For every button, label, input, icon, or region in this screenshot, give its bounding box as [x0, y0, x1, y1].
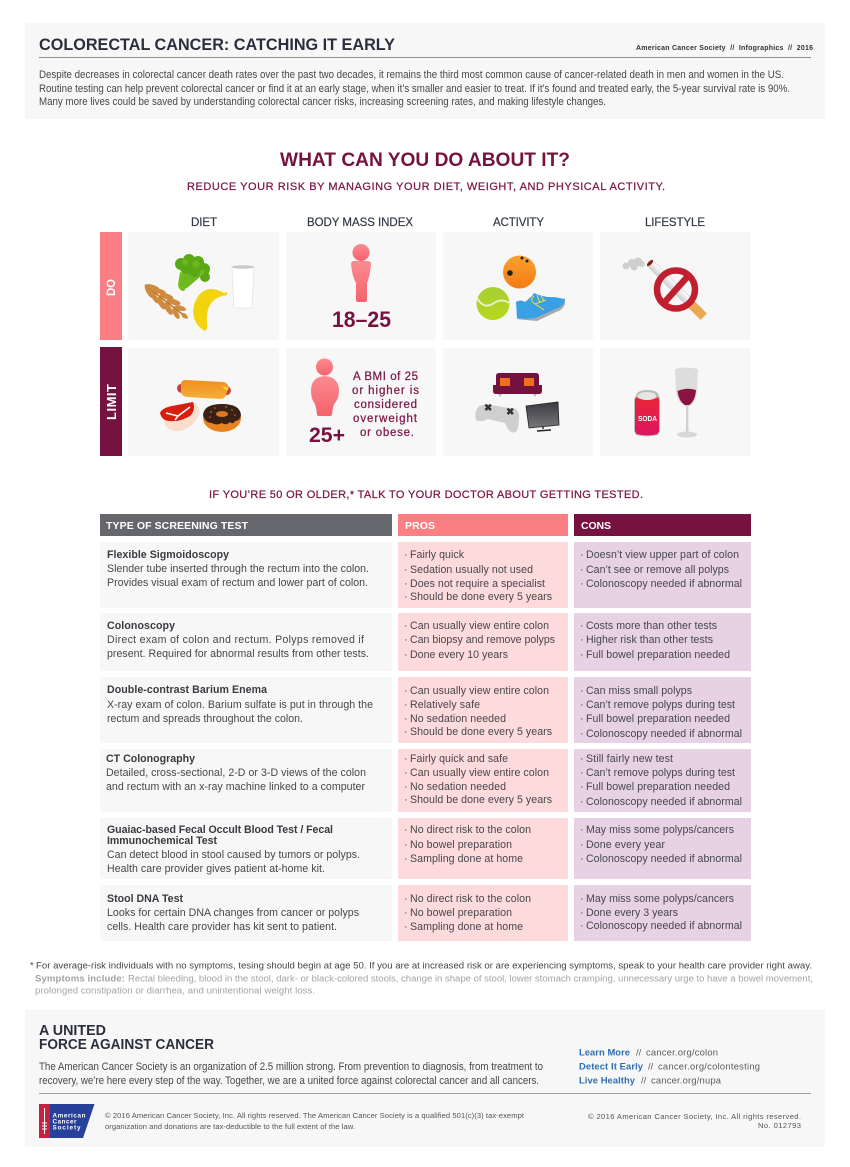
- footer links: //: [636, 1046, 642, 1058]
- row: ct colonography: Should be done every 5 years: [410, 794, 552, 806]
- row: double-contrast barium enema: Can’t remove polyps during test: [586, 699, 735, 711]
- row: ct colonography: CT Colonography: [106, 753, 195, 765]
- row: guaiac-based fecal occult blood test: ·: [580, 853, 584, 865]
- row: flexible sigmoidoscopy: ·: [580, 549, 584, 561]
- panel: bmi do: [286, 232, 436, 340]
- row: colonoscopy: present. Required for abnormal results from other tests.: [107, 648, 369, 660]
- row: guaiac-based fecal occult blood test: Health care provider gives patient at-home kit.: [107, 863, 325, 875]
- panel: diet do: [128, 232, 279, 340]
- bmi note: considered: [354, 399, 417, 411]
- row: ct colonography: Full bowel preparation needed: [586, 781, 730, 793]
- icon: donut: [203, 404, 241, 432]
- row: ct colonography: No sedation needed: [410, 781, 506, 793]
- row: flexible sigmoidoscopy: ·: [580, 578, 584, 590]
- row: guaiac-based fecal occult blood test: ·: [404, 853, 408, 865]
- row: colonoscopy: Can usually view entire colon: [410, 620, 549, 632]
- row: flexible sigmoidoscopy: ·: [404, 564, 408, 576]
- row: flexible sigmoidoscopy: ·: [404, 549, 408, 561]
- row: stool dna test: Looks for certain DNA changes from cancer or polyps: [107, 907, 359, 919]
- footer heading: FORCE AGAINST CANCER: [39, 1037, 214, 1053]
- row: guaiac-based fecal occult blood test: Guaiac-based Fecal Occult Blood Test / Fecal: [107, 824, 333, 836]
- footer links: Learn More: [579, 1046, 630, 1058]
- row: colonoscopy: ·: [404, 649, 408, 661]
- row: stool dna test: ·: [404, 921, 408, 933]
- row: colonoscopy: Full bowel preparation needed: [586, 649, 730, 661]
- row: guaiac-based fecal occult blood test: Can detect blood in stool caused by tumors or polyps.: [107, 849, 360, 861]
- row: stool dna test: cells. Health care provider has kit sent to patient.: [107, 921, 337, 933]
- row: guaiac-based fecal occult blood test: Immunochemical Test: [107, 835, 217, 847]
- row label: limit: [100, 347, 122, 456]
- column labels: LIFESTYLE: [645, 217, 705, 229]
- row: ct colonography: [100, 749, 751, 812]
- row: guaiac-based fecal occult blood test: ·: [404, 824, 408, 836]
- row: stool dna test: May miss some polyps/cancers: [586, 893, 734, 905]
- icon: soda can: SODA: [638, 416, 657, 423]
- row: flexible sigmoidoscopy: Sedation usually not used: [410, 564, 533, 576]
- row: flexible sigmoidoscopy: ·: [404, 578, 408, 590]
- bmi note: [352, 371, 419, 439]
- footer links: Detect It Early: [579, 1060, 644, 1072]
- bmi note: overweight: [353, 413, 418, 425]
- row: ct colonography: ·: [404, 794, 408, 806]
- row: colonoscopy: ·: [580, 634, 584, 646]
- legal text: [105, 1111, 525, 1131]
- icon: tennis ball: [476, 287, 510, 320]
- panel: activity do: [443, 232, 593, 340]
- row: double-contrast barium enema: ·: [404, 726, 408, 738]
- row: colonoscopy: Colonoscopy: [107, 620, 175, 632]
- footnote: prolonged constipation or diarrhea, and unintentional weight loss.: [35, 986, 315, 996]
- footer heading: A UNITED: [39, 1023, 106, 1039]
- row: double-contrast barium enema: Can miss small polyps: [586, 685, 692, 697]
- logo: american cancer society: [39, 1104, 94, 1138]
- icon: game controller: ✖: [484, 403, 492, 414]
- row: ct colonography: Colonoscopy needed if abnormal: [586, 796, 742, 808]
- icon: game controller: ✖: [506, 407, 514, 418]
- footer text: The American Cancer Society is an organization of 2.5 million strong. From prevention to diagnosis, from treatment to: [39, 1061, 543, 1073]
- icon: healthy figure: [351, 244, 371, 302]
- row: ct colonography: ·: [580, 767, 584, 779]
- footer text: [39, 1061, 543, 1087]
- row: stool dna test: No bowel preparation: [410, 907, 512, 919]
- row: ct colonography: ·: [404, 781, 408, 793]
- row: colonoscopy: ·: [404, 634, 408, 646]
- icon: sneaker: [516, 293, 565, 321]
- icon: broccoli: [175, 254, 210, 291]
- row: double-contrast barium enema: rectum and spreads throughout the colon.: [107, 713, 303, 725]
- row: guaiac-based fecal occult blood test: Sampling done at home: [410, 853, 523, 865]
- row: colonoscopy: Can biopsy and remove polyps: [410, 634, 555, 646]
- row: double-contrast barium enema: ·: [580, 713, 584, 725]
- icon: hot dog: [177, 380, 231, 399]
- table header: cons: CONS: [581, 520, 611, 532]
- row: flexible sigmoidoscopy: Should be done every 5 years: [410, 591, 552, 603]
- row: stool dna test: No direct risk to the colon: [410, 893, 531, 905]
- row: ct colonography: ·: [404, 767, 408, 779]
- table header: pros: [398, 514, 568, 536]
- table: screening tests: [100, 514, 751, 941]
- copyright and number: No. 012793: [758, 1121, 801, 1130]
- footer links: //: [641, 1074, 647, 1086]
- row: flexible sigmoidoscopy: Fairly quick: [410, 549, 465, 561]
- row: ct colonography: and rectum with an x-ray machine linked to a computer: [106, 781, 365, 793]
- row: colonoscopy: Direct exam of colon and rectum. Polyps removed if: [107, 634, 364, 646]
- icon: soda can: [634, 390, 660, 436]
- row: flexible sigmoidoscopy: Slender tube inserted through the rectum into the colon.: [107, 563, 369, 575]
- footnote: [30, 960, 813, 996]
- row: double-contrast barium enema: Can usually view entire colon: [410, 685, 549, 697]
- row: double-contrast barium enema: ·: [580, 728, 584, 740]
- row: double-contrast barium enema: [100, 677, 751, 743]
- bmi range: 18–25: [332, 307, 391, 332]
- row: colonoscopy: Higher risk than other tests: [586, 634, 713, 646]
- row: stool dna test: ·: [404, 893, 408, 905]
- row: ct colonography: Can usually view entire colon: [410, 767, 549, 779]
- icon: no smoking: [646, 259, 707, 320]
- icon: glass of milk: [232, 265, 254, 308]
- row: colonoscopy: ·: [580, 620, 584, 632]
- row: ct colonography: Fairly quick and safe: [410, 753, 508, 765]
- row: guaiac-based fecal occult blood test: ·: [580, 839, 584, 851]
- row: stool dna test: ·: [580, 920, 584, 932]
- row: double-contrast barium enema: ·: [404, 685, 408, 697]
- subheading: reduce your risk: REDUCE YOUR RISK BY MANAGING YOUR DIET, WEIGHT, AND PHYSICAL ACTIVITY.: [187, 181, 665, 193]
- row: ct colonography: Can’t remove polyps during test: [586, 767, 735, 779]
- table header: pros: PROS: [405, 520, 435, 532]
- row: guaiac-based fecal occult blood test: ·: [404, 839, 408, 851]
- row label: do: [100, 232, 122, 340]
- legal text: © 2016 American Cancer Society, Inc. All rights reserved. The American Cancer Society is a qualified 501(c)(3) tax-exempt: [105, 1111, 525, 1120]
- legal text: organization and donations are tax-deductible to the full extent of the law.: [105, 1122, 355, 1131]
- row: colonoscopy: [100, 613, 751, 671]
- row: flexible sigmoidoscopy: Colonoscopy needed if abnormal: [586, 578, 742, 590]
- row: ct colonography: ·: [580, 796, 584, 808]
- row: guaiac-based fecal occult blood test: [100, 818, 751, 879]
- panel: footer: [25, 1010, 825, 1147]
- row: double-contrast barium enema: ·: [404, 713, 408, 725]
- row: stool dna test: [100, 885, 751, 941]
- row: double-contrast barium enema: Relatively safe: [410, 699, 480, 711]
- intro text: Routine testing can help prevent colorectal cancer or find it at an early stage, when it’s smaller and easier to treat. If it’s found and treated early, the 5-year survival rate is 90%.: [39, 83, 790, 95]
- panel: bmi limit: [286, 348, 436, 456]
- icon: smoke: [622, 258, 645, 270]
- bmi 25 plus: 25+: [309, 424, 345, 447]
- row: flexible sigmoidoscopy: Can’t see or remove all polyps: [586, 564, 729, 576]
- footnote: For average-risk individuals with no symptoms, tesing should begin at age 50. If you are at increased risk or are experiencing symptoms, speak to your health care provider right away.: [36, 960, 812, 972]
- row: flexible sigmoidoscopy: Provides visual exam of rectum and lower part of colon.: [107, 577, 368, 589]
- row: colonoscopy: ·: [580, 649, 584, 661]
- icon: bowling ball: [503, 256, 536, 288]
- row: flexible sigmoidoscopy: Flexible Sigmoidoscopy: [107, 549, 229, 561]
- row: ct colonography: ·: [404, 753, 408, 765]
- row: guaiac-based fecal occult blood test: Colonoscopy needed if abnormal: [586, 853, 742, 865]
- row: stool dna test: Colonoscopy needed if abnormal: [586, 920, 742, 932]
- footer text: recovery, we’re here every step of the way. Together, we are a united force against colorectal cancer and all cancers.: [39, 1075, 539, 1087]
- bmi note: or obese.: [360, 427, 414, 439]
- row label: limit: LIMIT: [104, 384, 119, 420]
- row: double-contrast barium enema: ·: [580, 699, 584, 711]
- row: ct colonography: Detailed, cross-sectional, 2-D or 3-D views of the colon: [106, 767, 366, 779]
- row: guaiac-based fecal occult blood test: No direct risk to the colon: [410, 824, 531, 836]
- row: ct colonography: ·: [580, 781, 584, 793]
- row: stool dna test: Sampling done at home: [410, 921, 523, 933]
- bmi note: or higher is: [352, 385, 419, 397]
- panel: lifestyle do: [600, 232, 750, 340]
- subheading: talk to your doctor: IF YOU’RE 50 OR OLDER,* TALK TO YOUR DOCTOR ABOUT GETTING TESTED.: [209, 489, 643, 501]
- footer links: cancer.org/colon: [646, 1046, 718, 1058]
- row: double-contrast barium enema: No sedation needed: [410, 713, 506, 725]
- icon: steak: [160, 402, 199, 431]
- column labels: BODY MASS INDEX: [307, 217, 413, 229]
- row label: do: DO: [104, 279, 118, 296]
- footer links: cancer.org/nupa: [651, 1074, 722, 1086]
- panel: diet limit: [128, 348, 279, 456]
- row: double-contrast barium enema: Colonoscopy needed if abnormal: [586, 728, 742, 740]
- icon: game controller: [475, 403, 519, 433]
- intro text: Despite decreases in colorectal cancer death rates over the past two decades, it remains the third most common cause of cancer-related death in men and women in the US.: [39, 69, 784, 81]
- row: double-contrast barium enema: Double-contrast Barium Enema: [107, 684, 267, 696]
- icon: television: [526, 402, 559, 431]
- icon: wine glass: [675, 368, 698, 438]
- row: double-contrast barium enema: ·: [404, 699, 408, 711]
- panel: activity limit: [443, 348, 593, 456]
- row: stool dna test: ·: [580, 907, 584, 919]
- panel: lifestyle limit: [600, 348, 750, 456]
- table header: test type: [100, 514, 392, 536]
- bmi note: A BMI of 25: [353, 371, 418, 383]
- row: stool dna test: ·: [404, 907, 408, 919]
- logo: american cancer society: Society: [52, 1124, 81, 1132]
- row: flexible sigmoidoscopy: Doesn’t view upper part of colon: [586, 549, 739, 561]
- title: COLORECTAL CANCER: CATCHING IT EARLY: [39, 35, 396, 54]
- table header: cons: [574, 514, 751, 536]
- footnote: *: [30, 960, 34, 972]
- intro text: [39, 69, 790, 108]
- footnote: Symptoms include:: [35, 974, 125, 984]
- footer heading: [39, 1023, 214, 1053]
- copyright and number: © 2016 American Cancer Society, Inc. All rights reserved.: [588, 1112, 801, 1121]
- footer links: Live Healthy: [579, 1074, 636, 1086]
- icon: sofa: [493, 373, 542, 397]
- row: guaiac-based fecal occult blood test: May miss some polyps/cancers: [586, 824, 734, 836]
- row: guaiac-based fecal occult blood test: No bowel preparation: [410, 839, 512, 851]
- logo: american cancer society: American: [52, 1112, 86, 1120]
- row: colonoscopy: ·: [404, 620, 408, 632]
- footer links: //: [648, 1060, 654, 1072]
- footer links: [579, 1046, 760, 1086]
- row: stool dna test: Stool DNA Test: [107, 893, 183, 905]
- row: colonoscopy: Costs more than other tests: [586, 620, 717, 632]
- column labels: ACTIVITY: [493, 217, 544, 229]
- table header: test type: TYPE OF SCREENING TEST: [106, 520, 249, 532]
- icon: wheat: [139, 277, 193, 326]
- row: flexible sigmoidoscopy: [100, 542, 751, 608]
- row: flexible sigmoidoscopy: ·: [404, 591, 408, 603]
- row: ct colonography: Still fairly new test: [586, 753, 673, 765]
- source credit: American Cancer Society // Infographics // 2016: [636, 45, 813, 52]
- column labels: [191, 217, 705, 229]
- icon: banana: [193, 289, 227, 331]
- row: double-contrast barium enema: ·: [580, 685, 584, 697]
- row: colonoscopy: Done every 10 years: [410, 649, 508, 661]
- row: double-contrast barium enema: X-ray exam of colon. Barium sulfate is put in through the: [107, 699, 373, 711]
- logo: american cancer society: Cancer: [52, 1118, 77, 1126]
- row: double-contrast barium enema: Should be done every 5 years: [410, 726, 552, 738]
- row: guaiac-based fecal occult blood test: ·: [580, 824, 584, 836]
- row: stool dna test: Done every 3 years: [586, 907, 678, 919]
- panel: header: [25, 23, 825, 119]
- heading: what can you do: WHAT CAN YOU DO ABOUT IT?: [280, 149, 570, 171]
- row: guaiac-based fecal occult blood test: Done every year: [586, 839, 665, 851]
- row: double-contrast barium enema: Full bowel preparation needed: [586, 713, 730, 725]
- row: stool dna test: ·: [580, 893, 584, 905]
- row: ct colonography: ·: [580, 753, 584, 765]
- row: flexible sigmoidoscopy: ·: [580, 564, 584, 576]
- column labels: DIET: [191, 217, 217, 229]
- footer links: cancer.org/colontesting: [658, 1060, 760, 1072]
- row: flexible sigmoidoscopy: Does not require a specialist: [410, 578, 545, 590]
- copyright and number: [588, 1112, 801, 1130]
- icon: overweight figure: [311, 358, 339, 416]
- intro text: Many more lives could be saved by understanding colorectal cancer risks, increasing screening rates, and making lifestyle changes.: [39, 96, 606, 108]
- footnote: Rectal bleeding, blood in the stool, dark- or black-colored stools, change in shape of stool, lower stomach cramping, unnecessary urge to have a bowel movement,: [128, 974, 813, 984]
